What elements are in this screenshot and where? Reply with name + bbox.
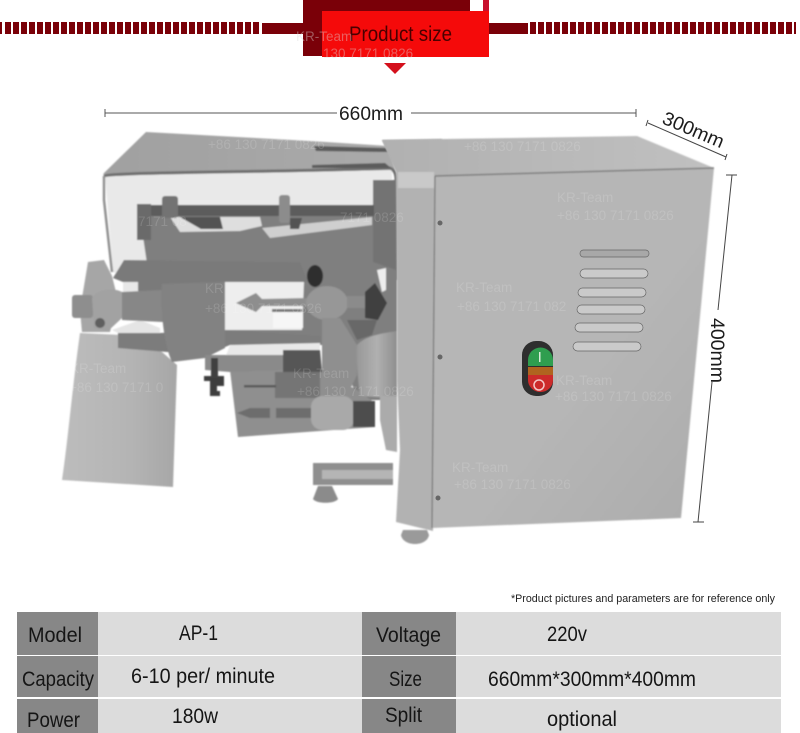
table text: Model — [28, 624, 82, 647]
bracket strip — [205, 355, 283, 372]
left small gap — [123, 282, 138, 292]
shaft collar — [92, 290, 122, 331]
width dimension: 660mm: 660mm — [339, 104, 403, 125]
table text: Size — [389, 668, 422, 691]
disclaimer note: *Product pictures and parameters are for reference only — [511, 593, 775, 605]
header banner — [0, 0, 796, 74]
watermarks: 7171 08 — [138, 214, 187, 229]
upper window gap — [170, 217, 262, 232]
watermarks: KR-Team — [296, 29, 352, 44]
watermarks — [69, 29, 674, 492]
lower band — [118, 330, 320, 355]
main shaft — [72, 295, 93, 318]
ventilation slots — [573, 250, 649, 351]
interior window — [225, 282, 304, 330]
cabinet foot — [401, 530, 429, 544]
watermarks: KR-Team — [293, 366, 349, 381]
lower gear — [353, 401, 375, 427]
depth dimension: 300mm: 300mm — [659, 108, 727, 153]
watermarks: KR-Team — [556, 373, 612, 388]
lower motor — [311, 396, 354, 430]
watermarks: KR-Team — [456, 280, 512, 295]
glass window — [105, 170, 393, 285]
watermarks: +86 130 7171 082 — [457, 299, 566, 314]
hub casting — [357, 331, 397, 398]
watermarks: +86 130 7171 0826 — [297, 384, 414, 399]
cone body — [122, 290, 163, 322]
upper motor — [306, 286, 348, 320]
decorative left segmented bar — [0, 22, 304, 34]
hood hinge plates — [312, 146, 391, 168]
watermarks: 7171 0826 — [340, 210, 404, 225]
watermarks: KR-Team — [70, 361, 126, 376]
banner red plate — [322, 11, 489, 57]
arrow blade part — [236, 293, 307, 312]
table text — [22, 622, 696, 732]
bracket foot — [313, 486, 338, 503]
watermarks: +86 130 7171 0826 — [464, 139, 581, 154]
depth dimension: 300mm — [646, 108, 727, 160]
top rod — [137, 205, 374, 216]
table row backgrounds — [98, 612, 781, 733]
watermarks: KR-Team — [452, 460, 508, 475]
watermarks: +86 130 7171 0826 — [208, 137, 325, 152]
table text: 220v — [547, 623, 587, 646]
main drum — [161, 282, 225, 362]
banner shadow block — [303, 0, 470, 56]
watermarks: +86 130 7171 0826 — [555, 389, 672, 404]
table text: 6-10 per/ minute — [131, 665, 275, 688]
table text: Split — [385, 704, 422, 727]
lower casting — [380, 396, 397, 452]
hinge top plate — [382, 139, 442, 167]
power switch — [522, 341, 553, 396]
machine hood and left mechanism — [62, 132, 442, 503]
lower back plate — [230, 370, 375, 437]
watermarks: 130 7171 0826 — [323, 46, 413, 61]
base bracket — [313, 463, 393, 485]
curved apron — [62, 333, 177, 487]
lower dark block — [283, 350, 322, 372]
cabinet top face — [382, 136, 714, 176]
watermarks: +86 130 7171 0826 — [205, 301, 322, 316]
lower gap — [225, 343, 320, 358]
specification table — [17, 612, 781, 733]
watermarks: KR — [205, 281, 224, 296]
panel edge — [435, 168, 714, 176]
table text: Power — [27, 709, 80, 732]
decorative right segmented bar — [489, 22, 796, 34]
watermarks: KR-Team — [557, 190, 613, 205]
machine cabinet — [382, 136, 714, 544]
knob — [307, 265, 323, 287]
table label cells — [17, 612, 456, 733]
hood frame edge — [104, 168, 396, 280]
watermarks: +86 130 7171 0826 — [454, 477, 571, 492]
height dimension: 400mm: 400mm — [706, 318, 727, 383]
panel screws — [436, 220, 442, 500]
table text: 660mm*300mm*400mm — [488, 668, 696, 691]
table text: optional — [547, 708, 617, 731]
shaft right of motor — [347, 296, 369, 308]
table text: Voltage — [376, 624, 441, 647]
gear shadow — [347, 320, 377, 340]
small right gap — [377, 268, 386, 292]
small gap below collar — [112, 320, 160, 333]
table text: Capacity — [22, 668, 94, 691]
hood top face — [103, 132, 396, 174]
inner grey back plate — [140, 180, 397, 400]
adjustment bolt — [204, 376, 224, 396]
support arm — [322, 318, 357, 400]
dark gear — [365, 283, 387, 320]
cabinet front panel — [432, 168, 714, 528]
lower spindle — [237, 408, 312, 418]
height dimension: 400mm — [693, 175, 737, 522]
end disc plate — [80, 260, 118, 332]
table text: AP-1 — [179, 622, 218, 645]
machine illustration — [62, 132, 714, 544]
banner corner strip — [483, 0, 489, 12]
watermarks: +86 130 7171 0826 — [557, 208, 674, 223]
table text: 180w — [172, 705, 219, 728]
banner pointer — [384, 63, 406, 74]
banner title: Product size — [349, 23, 452, 46]
upper band — [113, 260, 308, 300]
front post — [396, 172, 435, 531]
width dimension: 660mm — [105, 104, 636, 125]
watermarks: +86 130 7171 0 — [69, 380, 163, 395]
